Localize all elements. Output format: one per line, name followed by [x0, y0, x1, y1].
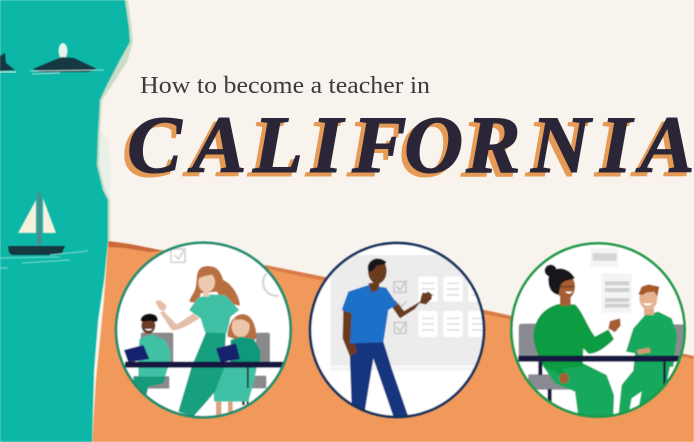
whiteboard with cards: [330, 255, 487, 371]
table: [125, 362, 283, 368]
whale with water spout: [30, 43, 104, 74]
ring: [310, 243, 484, 417]
orange ground: [92, 241, 694, 442]
chairs: [519, 324, 685, 393]
documents: [591, 248, 632, 313]
icon: checkbox: [171, 249, 185, 262]
table: [518, 356, 679, 362]
title: California: CALIFORNIA: [122, 103, 690, 194]
subtitle: How to become a teacher in: [140, 73, 430, 99]
teal ocean with torn edge: [0, 0, 133, 442]
young man: [618, 284, 677, 417]
sailboat: [0, 193, 88, 268]
left student: [124, 314, 173, 402]
illustration circle: teacher at board: [310, 243, 487, 418]
right student: [213, 314, 270, 417]
teacher: [155, 266, 240, 417]
title: California: CALIFORNIA: [127, 99, 694, 190]
ring: [511, 243, 685, 417]
illustration circle: teacher with students: [116, 243, 291, 417]
woman: [533, 265, 621, 417]
whale at left edge: [0, 53, 16, 72]
illustration circle: two people at table: [511, 243, 685, 417]
person pointing: [342, 258, 433, 418]
ring: [116, 243, 291, 417]
